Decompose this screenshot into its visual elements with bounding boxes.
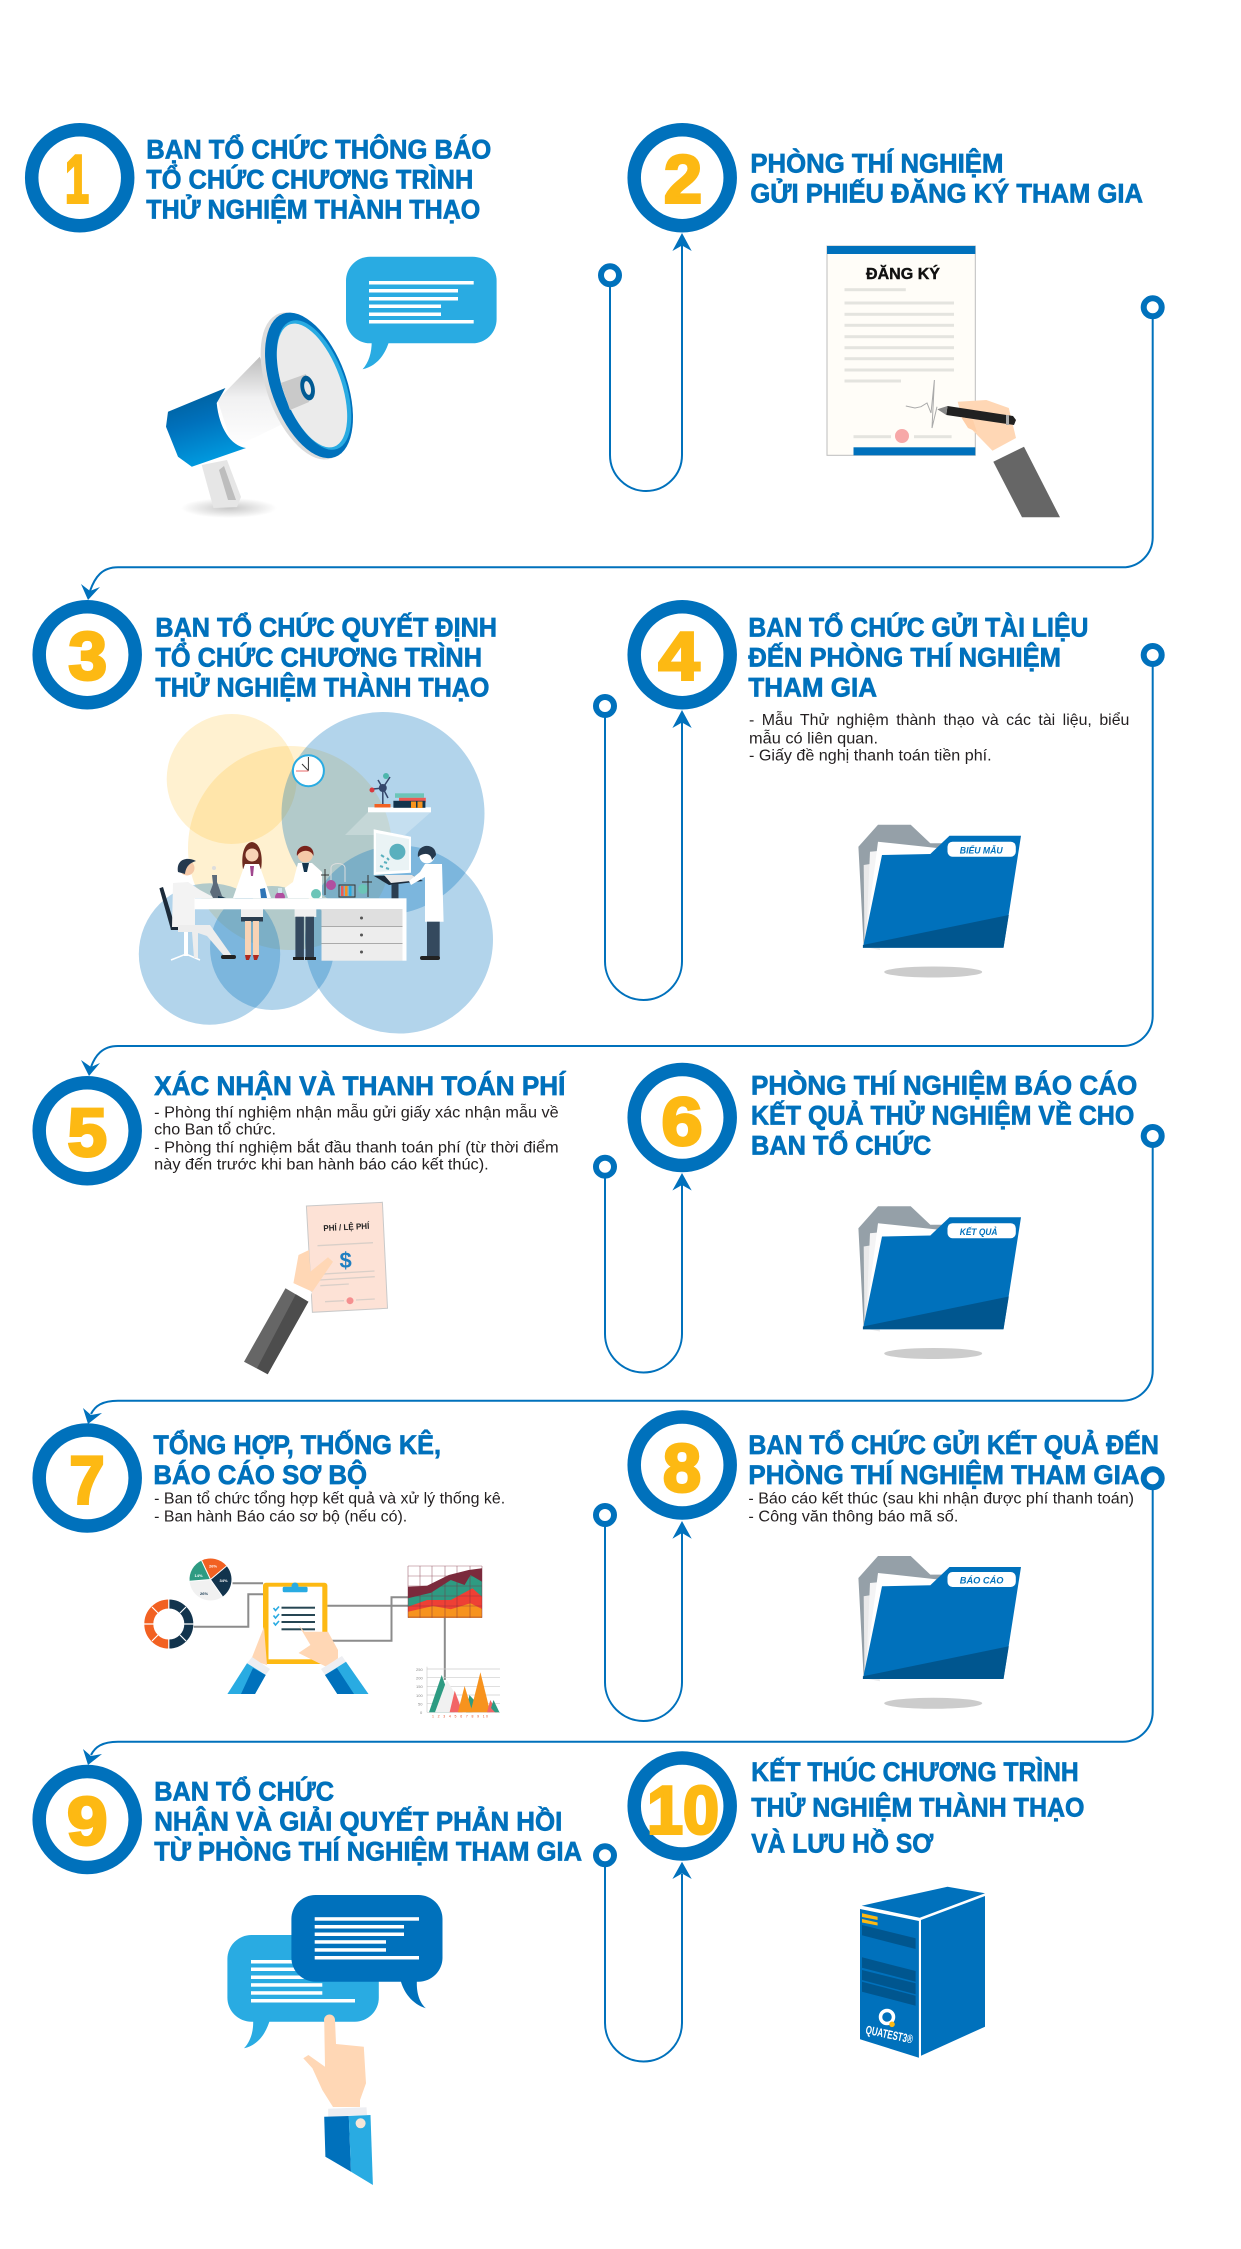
number badge 7 [39,1430,135,1526]
number badge 3 [39,607,135,703]
number badge 7: 7 [70,1442,104,1518]
panel: step 6 [634,1070,1137,1359]
icon: folder báo cáo [858,1556,1021,1709]
number badge 9: 9 [67,1784,108,1860]
mountain chart: 200 [416,1676,423,1680]
mountain chart: 0 [420,1710,423,1715]
heading step 9: BAN TỔ CHỨC [154,1776,334,1807]
scientist man [285,846,322,960]
panel: step 5 [39,1070,567,1374]
heading step 8: PHÒNG THÍ NGHIỆM THAM GIA [748,1459,1140,1490]
number badge 5: 5 [68,1095,107,1171]
pie chart: 26% [200,1591,208,1596]
mountain chart: 50 [418,1702,423,1706]
heading step 9: TỪ PHÒNG THÍ NGHIỆM THAM GIA [154,1836,582,1867]
mountain chart: 100 [416,1693,423,1698]
number badge 8: 8 [663,1430,701,1506]
number badge 9 [39,1772,135,1868]
number badge 1 [32,130,128,226]
connector: step 1 to 2 [601,233,692,491]
shelf with molecule and books [345,773,431,835]
number badge 6 [634,1070,730,1166]
heading step 9: NHẬN VÀ GIẢI QUYẾT PHẢN HỒI [154,1805,562,1837]
heading step 4: ĐẾN PHÒNG THÍ NGHIỆM [748,642,1061,673]
icon: fee document held by hand [244,1202,388,1374]
monitor [374,829,423,899]
heading step 2: GỬI PHIẾU ĐĂNG KÝ THAM GIA [750,176,1143,208]
heading step 3: THỬ NGHIỆM THÀNH THẠO [155,671,489,703]
icon: archive server: QUATEST3® [864,2023,914,2046]
heading step 7: BÁO CÁO SƠ BỘ [153,1459,367,1490]
panel: step 3 [39,607,497,1034]
icon: fee document held by hand: PHÍ / LỆ PHÍ [323,1220,370,1233]
illustration: statistics and charts [144,1559,500,1718]
mountain chart [416,1667,500,1718]
number badge 2 [634,130,730,226]
area chart [408,1566,482,1618]
heading step 5: XÁC NHẬN VÀ THANH TOÁN PHÍ [154,1070,567,1101]
connector: step 7 to 8 [596,1506,692,1721]
icon: folder biểu mẫu [858,825,1021,978]
heading step 4: THAM GIA [748,673,877,703]
connector: step 9 to 10 [596,1846,692,2061]
panel: step 10 [634,1756,1084,2058]
scientist woman [233,842,271,960]
heading step 4 [748,611,1088,703]
connector: step 5 to 6 [596,1158,692,1372]
panel: step 1 [32,130,497,518]
mountain chart: 1 2 3 4 5 6 7 8 9 10 [432,1714,488,1718]
scientist seated at microscope [159,859,236,960]
heading step 7: TỔNG HỢP, THỐNG KÊ, [153,1428,441,1460]
connector lines [194,1583,445,1680]
icon: archive server [860,1887,985,2058]
icon: megaphone [166,301,370,518]
panel: step 2 [634,130,1143,517]
number badge 10 [634,1758,730,1854]
icon: folder kết quả [858,1206,1021,1359]
clock [293,755,324,786]
scientist right with mask [409,846,444,960]
heading step 7 [153,1428,441,1490]
donut chart [144,1599,194,1649]
heading step 6: PHÒNG THÍ NGHIỆM BÁO CÁO [751,1070,1137,1101]
connector: step 8 to 9 [83,1469,1162,1765]
heading step 2 [750,147,1143,208]
number badge 4 [634,607,730,703]
pie chart: 26% [209,1564,217,1568]
text block step 5 [154,1104,559,1173]
connector: step 4 to 5 [81,646,1162,1076]
heading step 2: PHÒNG THÍ NGHIỆM [750,147,1003,178]
heading step 10: KẾT THÚC CHƯƠNG TRÌNH [751,1756,1079,1787]
number badge 5 [39,1083,135,1179]
heading step 3: BẠN TỔ CHỨC QUYẾT ĐỊNH [155,612,497,643]
glassware [275,864,372,902]
connector: step 2 to 3 [81,298,1162,600]
illustration: laboratory scene [139,712,493,1034]
text block step 4 [749,712,1129,764]
icon: registration form with signing hand [827,246,1060,517]
number badge 10: 10 [647,1772,719,1848]
heading step 10: VÀ LƯU HỒ SƠ [751,1827,933,1858]
heading step 4: BAN TỔ CHỨC GỬI TÀI LIỆU [748,611,1088,643]
heading step 3 [155,612,497,703]
clipboard [263,1582,327,1664]
heading step 6 [751,1070,1137,1161]
number badge 2: 2 [664,142,702,218]
heading step 6: BAN TỔ CHỨC [751,1130,931,1161]
text block step 7 [154,1490,505,1525]
heading step 1: THỬ NGHIỆM THÀNH THẠO [146,192,480,224]
connector: step 6 to 7 [83,1127,1162,1424]
icon: folder kết quả: KẾT QUẢ [960,1226,997,1237]
icon: registration form with signing hand: ĐĂNG KÝ [866,265,941,283]
icon: two speech bubbles [227,1895,442,2048]
heading step 1: BẠN TỔ CHỨC THÔNG BÁO [146,133,491,164]
heading step 1: TỔ CHỨC CHƯƠNG TRÌNH [146,163,473,194]
text block step 8 [748,1490,1134,1525]
number badge 8 [634,1417,730,1513]
text block step 5: - Phòng thí nghiệm bắt đầu thanh toán phí (từ thời điểm [154,1139,559,1156]
icon: folder báo cáo: BÁO CÁO [960,1576,1004,1586]
icon: fee document held by hand: $ [340,1248,352,1273]
number badge 4: 4 [658,618,700,694]
icon: folder biểu mẫu: BIỂU MẪU [960,844,1003,855]
icon: speech bubble [346,257,497,369]
panel: step 8 [634,1417,1159,1709]
panel: step 4 [634,607,1129,978]
heading step 10: THỬ NGHIỆM THÀNH THẠO [751,1791,1084,1823]
heading step 8: BAN TỔ CHỨC GỬI KẾT QUẢ ĐẾN [748,1428,1159,1460]
connector: step 3 to 4 [596,697,692,1000]
text block step 4: - Mẫu Thử nghiệm thành thạo và các tài liệu, biểu [749,712,1129,729]
text block step 5: - Phòng thí nghiệm nhận mẫu gửi giấy xác nhận mẫu về [154,1104,559,1121]
heading step 1 [146,133,491,224]
text block step 8: - Báo cáo kết thúc (sau khi nhận được phí thanh toán) [748,1490,1134,1507]
pie chart: 14% [194,1573,203,1578]
text block step 7: - Ban tổ chức tổng hợp kết quả và xử lý thống kê. [154,1490,505,1507]
heading step 3: TỔ CHỨC CHƯƠNG TRÌNH [155,642,482,673]
heading step 9 [154,1776,582,1867]
pie chart [190,1559,231,1600]
text block step 7: - Ban hành Báo cáo sơ bộ (nếu có). [154,1508,407,1525]
text block step 4: - Giấy đề nghị thanh toán tiền phí. [749,748,992,764]
text block step 4: mẫu có liên quan. [749,730,878,747]
heading step 8 [748,1428,1159,1490]
icon: pointing hand [303,2014,373,2185]
text block step 5: này đến trước khi ban hành báo cáo kết thúc). [154,1156,489,1173]
lab bench with drawers [194,898,406,961]
heading step 6: KẾT QUẢ THỬ NGHIỆM VỀ CHO [751,1099,1134,1131]
panel: step 9 [39,1772,582,2185]
text block step 5: cho Ban tổ chức. [154,1122,276,1139]
number badge 3: 3 [68,618,107,694]
hands holding clipboard [227,1625,368,1694]
number badge 6: 6 [662,1084,702,1160]
panel: step 7 [39,1428,505,1718]
heading step 10 [751,1756,1084,1858]
mountain chart: 150 [416,1684,423,1689]
number badge 1: 1 [65,142,89,218]
text block step 8: - Công văn thông báo mã số. [748,1508,958,1525]
mountain chart: 250 [416,1667,423,1672]
pie chart: 34% [220,1578,228,1583]
